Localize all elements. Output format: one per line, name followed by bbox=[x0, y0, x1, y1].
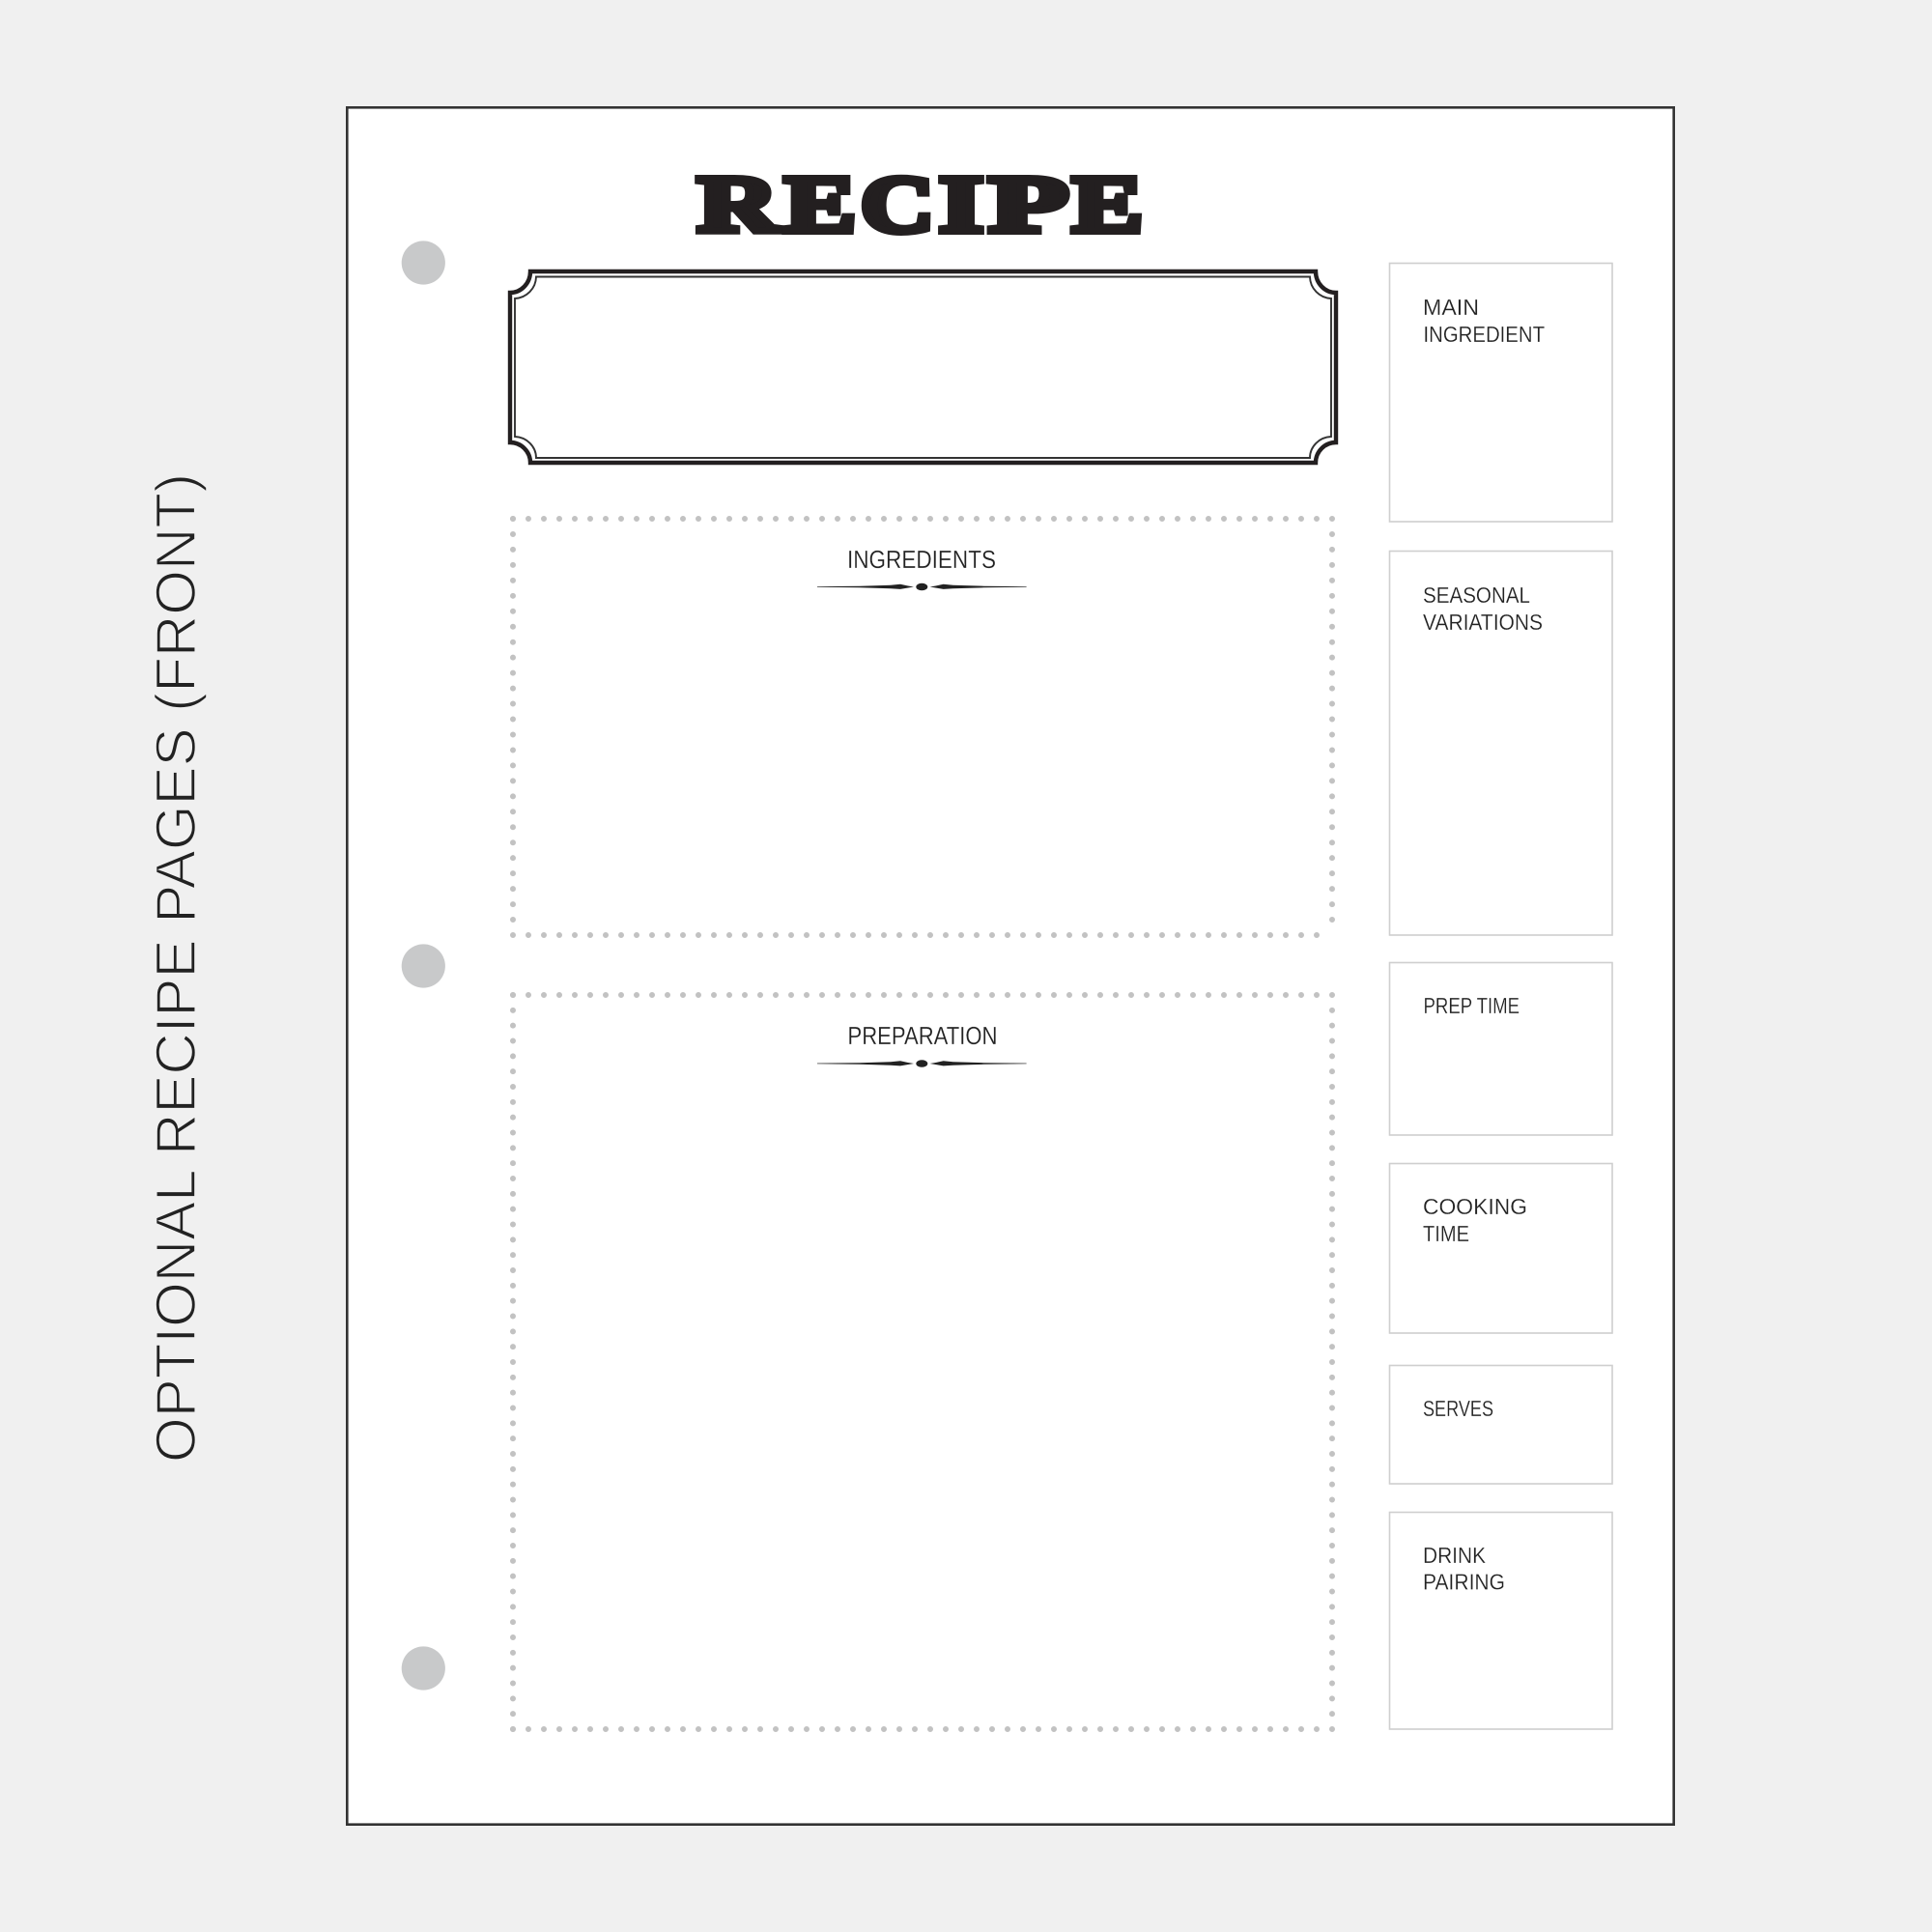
box: drink pairing bbox=[1389, 1513, 1612, 1729]
box: main ingredient: INGREDIENT bbox=[1424, 322, 1545, 347]
box: prep time bbox=[1389, 962, 1612, 1135]
heading: recipe: I bbox=[939, 160, 983, 249]
preparation heading: PREPARATION bbox=[848, 1021, 997, 1050]
box: drink pairing: DRINK bbox=[1423, 1543, 1487, 1568]
box: seasonal variations: VARIATIONS bbox=[1423, 610, 1543, 635]
box: seasonal variations: SEASONAL bbox=[1423, 582, 1530, 608]
box: cooking time bbox=[1389, 1163, 1612, 1333]
panel: ingredients bbox=[513, 519, 1332, 935]
ticket-shaped title frame bbox=[510, 271, 1336, 463]
rotated side caption: OPTIONAL RECIPE PAGES (FRONT) bbox=[145, 473, 208, 1463]
ingredients heading: INGREDIENTS bbox=[847, 545, 996, 574]
binder holes bbox=[402, 241, 445, 1690]
box: prep time: PREP TIME bbox=[1424, 993, 1520, 1018]
box: seasonal variations bbox=[1389, 551, 1612, 935]
heading: recipe: E bbox=[1072, 160, 1143, 249]
box: main ingredient bbox=[1389, 263, 1612, 522]
heading: recipe: R bbox=[697, 160, 781, 249]
box: drink pairing: PAIRING bbox=[1423, 1569, 1505, 1594]
heading: recipe: E bbox=[784, 160, 856, 249]
panel: recipe page bbox=[347, 107, 1674, 1825]
box: cooking time: TIME bbox=[1423, 1221, 1469, 1246]
heading: recipe: P bbox=[989, 160, 1068, 249]
preparation ornament bbox=[817, 1060, 1027, 1067]
box: cooking time: COOKING bbox=[1423, 1194, 1527, 1219]
box: serves: SERVES bbox=[1423, 1396, 1493, 1421]
heading: recipe: C bbox=[861, 160, 934, 249]
box: serves bbox=[1389, 1366, 1612, 1484]
panel: preparation bbox=[513, 995, 1332, 1729]
ingredients ornament bbox=[817, 583, 1027, 590]
box: main ingredient: MAIN bbox=[1423, 295, 1479, 320]
